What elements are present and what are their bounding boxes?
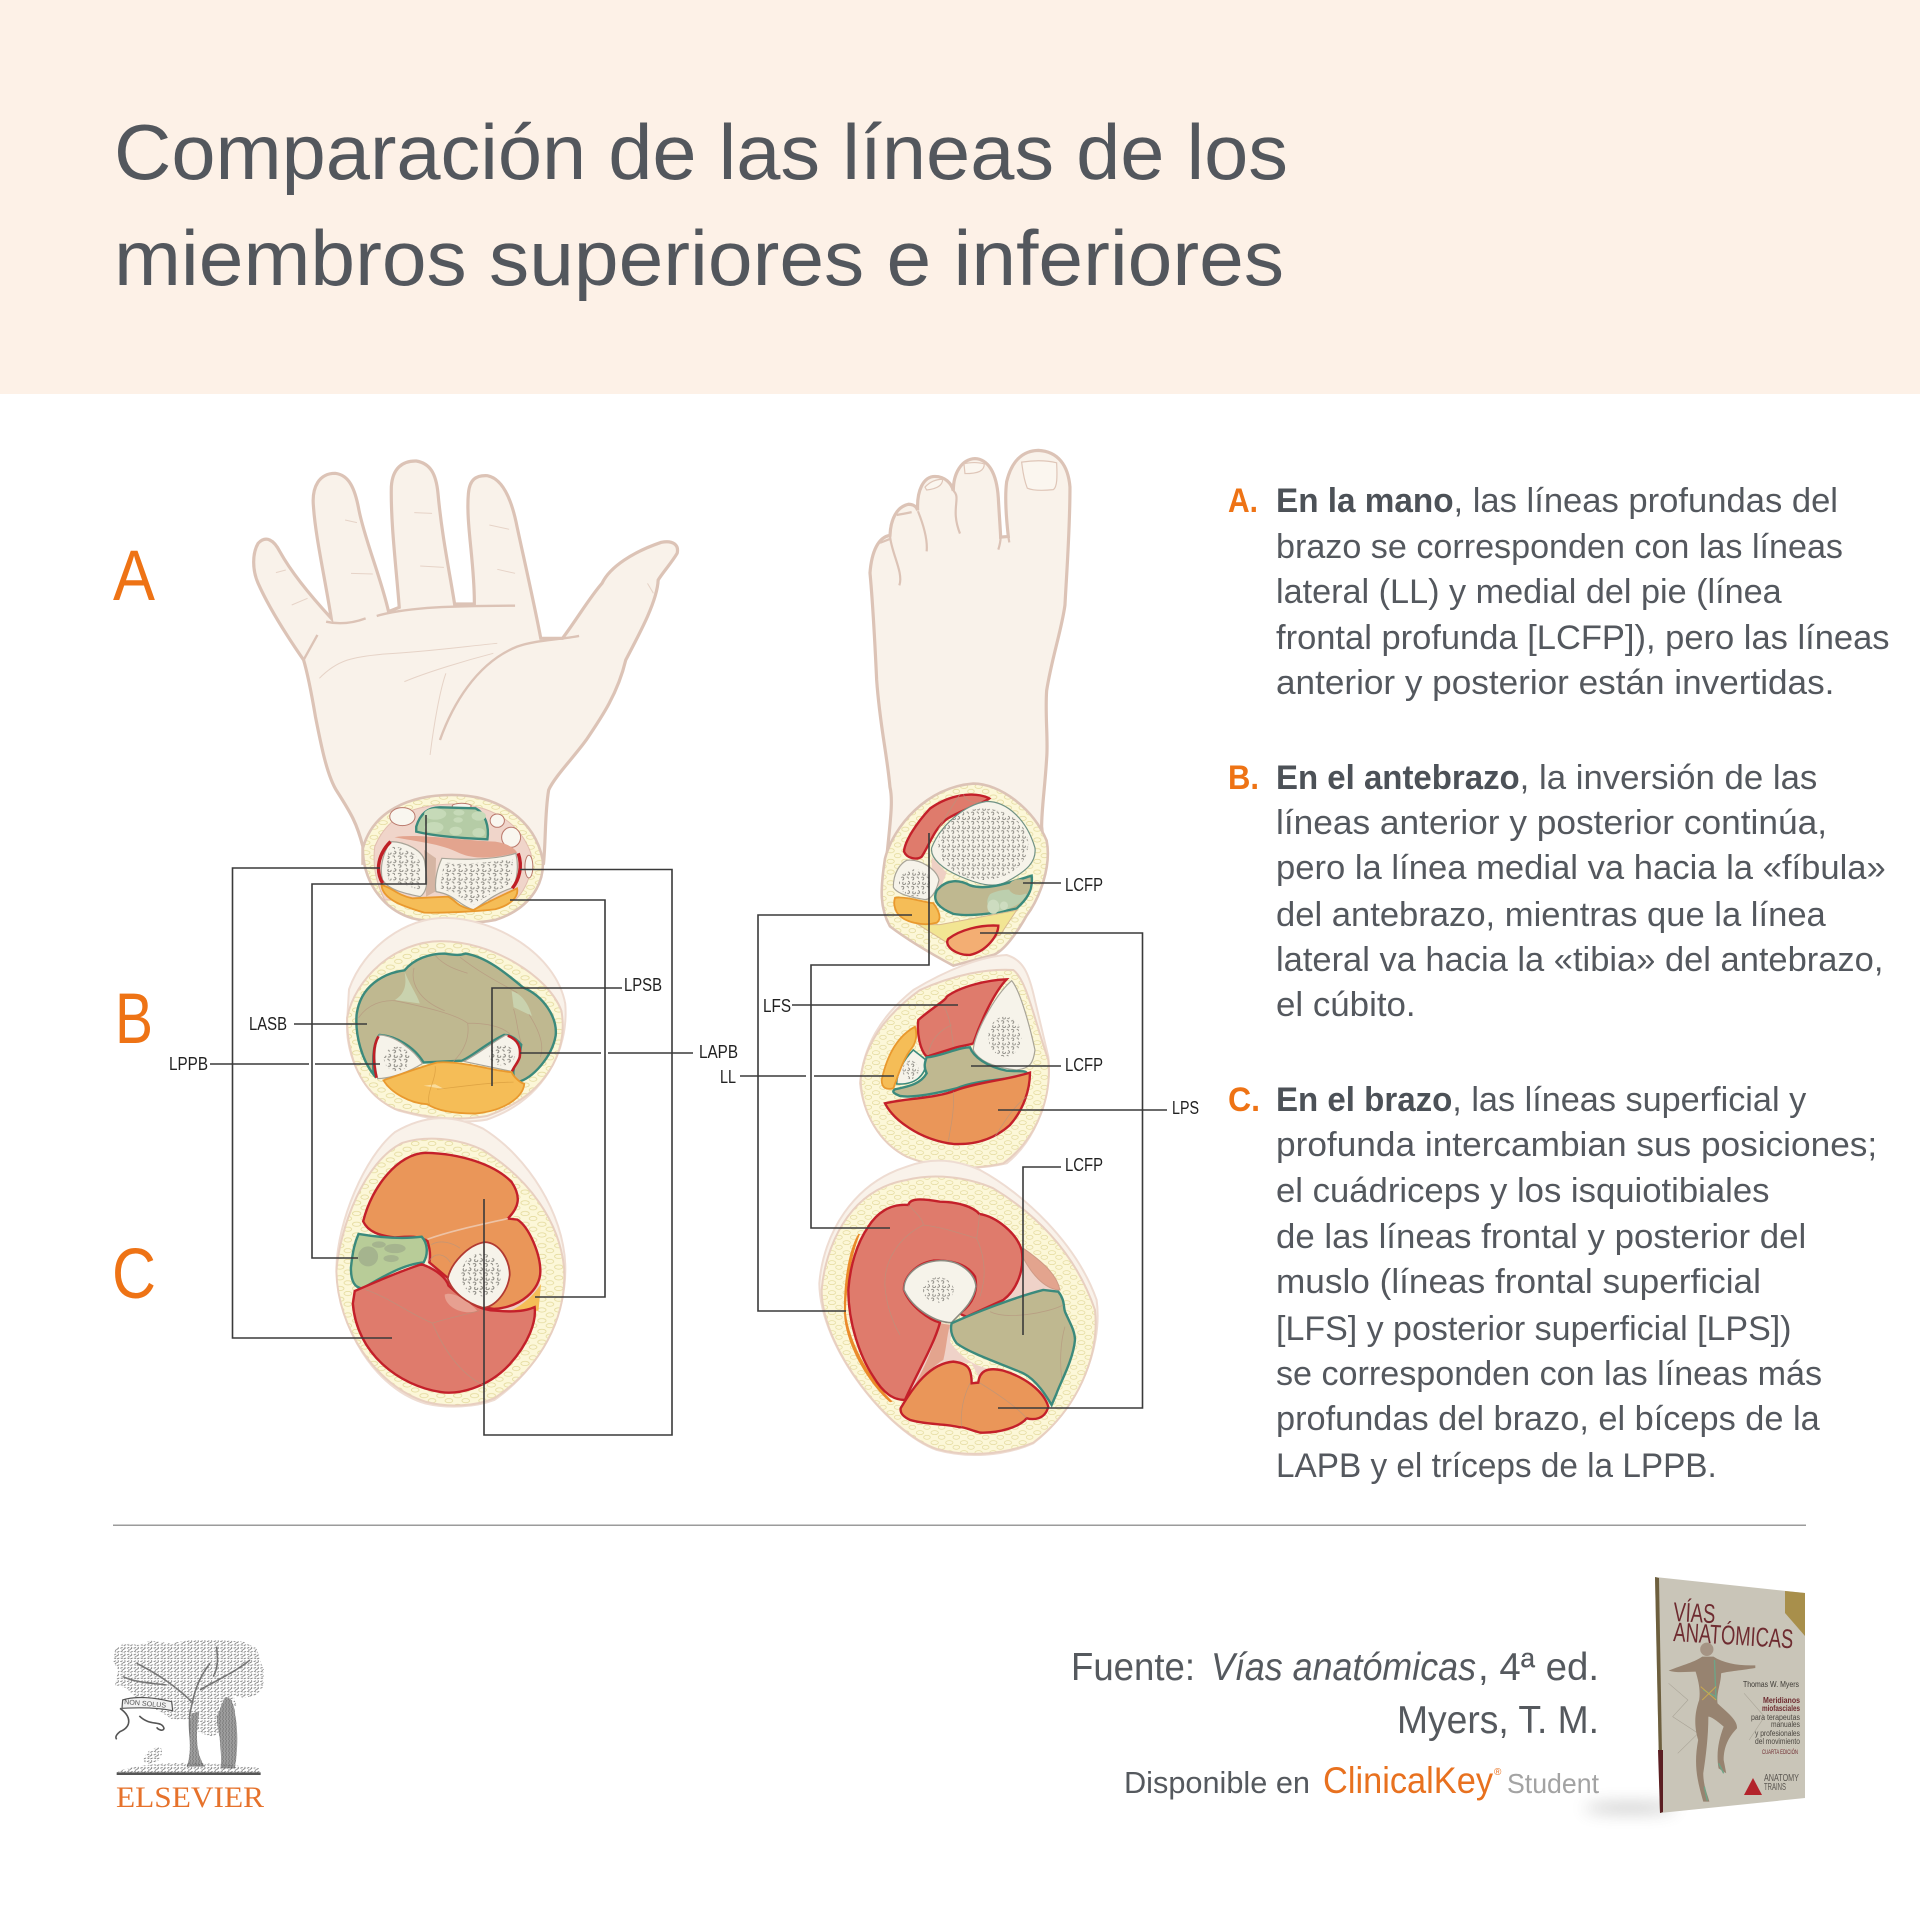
book figure	[1669, 1643, 1764, 1802]
text block C: se corresponden con las líneas más	[1276, 1355, 1822, 1393]
source text	[1071, 1646, 1599, 1742]
text block B: pero la línea medial va hacia la «fíbula»	[1276, 849, 1886, 887]
section letter C: C	[112, 1235, 156, 1314]
source text: Myers, T. M.	[1397, 1699, 1599, 1742]
text block B: líneas anterior y posterior continúa,	[1276, 804, 1827, 842]
book small text: Meridianos	[1763, 1696, 1800, 1705]
book shadow	[1584, 1804, 1676, 1812]
line labels: LL	[720, 1067, 736, 1087]
text block C: [LFS] y posterior superficial [LPS])	[1276, 1310, 1792, 1348]
book small text	[1743, 1679, 1800, 1795]
logo motto: NON SOLUS	[124, 1699, 167, 1710]
availability line: ClinicalKey	[1323, 1760, 1493, 1801]
text block A: anterior y posterior están invertidas.	[1276, 664, 1834, 702]
text block C: profunda intercambian sus posiciones;	[1276, 1126, 1877, 1164]
illustration: lower leg and thigh sections	[819, 955, 1098, 1455]
text block B: , la inversión de las	[1520, 759, 1817, 797]
book small text: del movimiento	[1755, 1737, 1800, 1746]
book small text: manuales	[1771, 1720, 1800, 1729]
text block B: En el antebrazo	[1276, 759, 1520, 797]
text block C: , las líneas superficial y	[1452, 1081, 1806, 1119]
book small text: CUARTA EDICIÓN	[1762, 1749, 1798, 1756]
title	[114, 108, 1288, 302]
section letter A: A	[113, 537, 156, 616]
line labels	[169, 875, 1199, 1175]
leader lines	[210, 815, 1167, 1435]
source text: Vías anatómicas	[1211, 1646, 1476, 1689]
line labels: LAPB	[699, 1042, 738, 1062]
title: miembros superiores e inferiores	[114, 214, 1284, 302]
text block C: LAPB y el tríceps de la LPPB.	[1276, 1447, 1717, 1485]
book cover	[1655, 1577, 1805, 1813]
text block A: , las líneas profundas del	[1454, 482, 1838, 520]
book title: ANATÓMICAS	[1673, 1616, 1794, 1654]
book small text: TRAINS	[1764, 1782, 1786, 1793]
text block A	[1228, 482, 1890, 702]
line labels: LPS	[1172, 1098, 1199, 1118]
illustration: foot and ankle section	[870, 450, 1070, 966]
forearm cross-section	[347, 918, 566, 1121]
toe details	[880, 491, 1009, 585]
title: Comparación de las líneas de los	[114, 108, 1288, 196]
book small text: y profesionales	[1755, 1729, 1800, 1738]
logo tree	[113, 1640, 264, 1774]
text block B: B.	[1228, 759, 1259, 797]
line labels: LCFP	[1065, 1055, 1103, 1075]
text block C	[1228, 1081, 1877, 1485]
section letter B: B	[115, 980, 153, 1059]
line labels: LFS	[763, 996, 791, 1016]
availability line: Student	[1507, 1768, 1599, 1799]
availability line: Disponible en	[1124, 1765, 1310, 1800]
source text: Fuente:	[1071, 1646, 1195, 1689]
book title: VÍAS	[1673, 1597, 1716, 1629]
Elsevier logo	[113, 1640, 264, 1814]
source text: , 4ª ed.	[1478, 1646, 1599, 1689]
text block C: C.	[1228, 1081, 1260, 1119]
text block C: profundas del brazo, el bíceps de la	[1276, 1400, 1820, 1438]
book small text: ANATOMY	[1764, 1773, 1799, 1784]
book title	[1673, 1597, 1794, 1654]
line labels: LPPB	[169, 1054, 208, 1074]
availability line	[1124, 1760, 1599, 1801]
book small text: Thomas W. Myers	[1743, 1679, 1799, 1689]
text block B	[1228, 759, 1886, 1024]
logo wordmark: ELSEVIER	[116, 1781, 264, 1814]
foot outline	[870, 450, 1070, 859]
hand creases	[276, 513, 653, 755]
text block A: brazo se corresponden con las líneas	[1276, 528, 1843, 566]
text block C: de las líneas frontal y posterior del	[1276, 1218, 1806, 1256]
illustration: forearm and upper arm sections	[336, 918, 566, 1407]
text block C: el cuádriceps y los isquiotibiales	[1276, 1172, 1770, 1210]
text block C: muslo (líneas frontal superficial	[1276, 1263, 1761, 1301]
text block A: frontal profunda [LCFP]), pero las líneas	[1276, 619, 1890, 657]
book small text: para terapeutas	[1751, 1713, 1800, 1722]
line labels: LPSB	[624, 975, 662, 995]
lower leg cross-section	[860, 955, 1049, 1168]
text block C: En el brazo	[1276, 1081, 1452, 1119]
hand outline	[254, 461, 678, 863]
line labels: LCFP	[1065, 1155, 1103, 1175]
thigh cross-section	[819, 1161, 1098, 1455]
illustration: hand and wrist section	[254, 461, 678, 923]
wrist cross-section	[363, 795, 543, 923]
line labels: LASB	[249, 1014, 287, 1034]
text block A: lateral (LL) y medial del pie (línea	[1276, 573, 1782, 611]
text block B: lateral va hacia la «tibia» del antebrazo,	[1276, 941, 1883, 979]
text block B: el cúbito.	[1276, 986, 1416, 1024]
line labels: LCFP	[1065, 875, 1103, 895]
ankle cross-section	[882, 784, 1048, 966]
header band	[0, 0, 1920, 394]
text block B: del antebrazo, mientras que la línea	[1276, 896, 1826, 934]
book badge	[1785, 1591, 1805, 1636]
availability line: ®	[1494, 1767, 1502, 1778]
text block A: En la mano	[1276, 482, 1454, 520]
book small text: miofasciales	[1762, 1704, 1800, 1713]
upper arm cross-section	[336, 1118, 565, 1407]
text block A: A.	[1228, 482, 1258, 520]
